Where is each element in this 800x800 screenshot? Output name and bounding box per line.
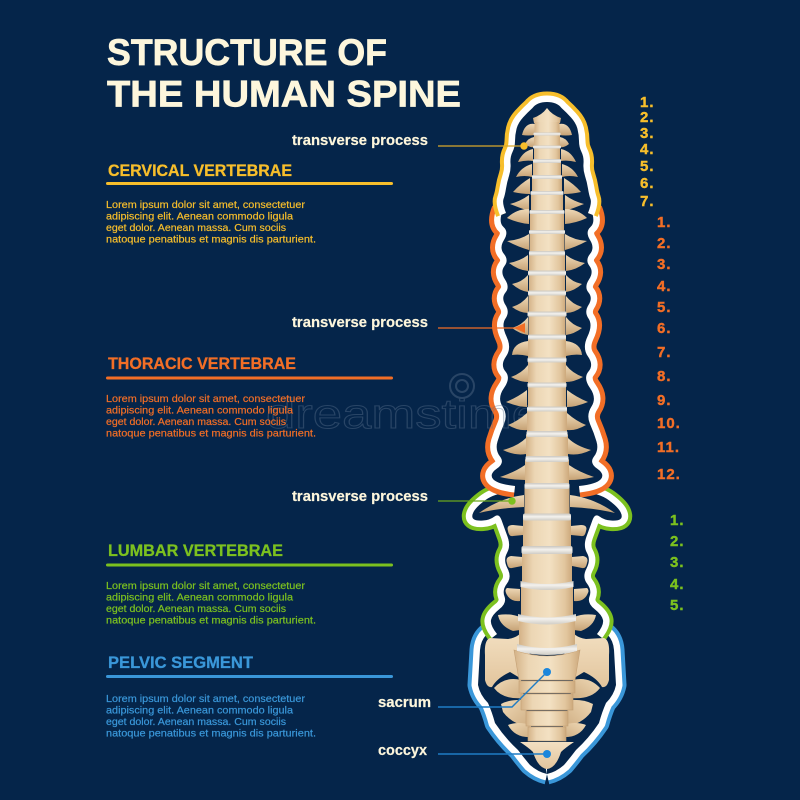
text block	[106, 199, 316, 246]
text block: natoque penatibus et magnis dis parturient.	[106, 428, 316, 440]
numbers: thoracic: 3.	[657, 256, 672, 273]
sacrum central plates	[514, 650, 580, 741]
text block: Lorem ipsum dolor sit amet, consectetuer	[106, 580, 306, 592]
numbers: cervical: 3.	[640, 125, 655, 142]
title: STRUCTURE OF	[107, 31, 387, 73]
numbers: thoracic	[657, 214, 681, 483]
callout: thoracic transverse process	[292, 314, 525, 333]
text block: Lorem ipsum dolor sit amet, consectetuer	[106, 393, 306, 405]
numbers: cervical: 6.	[640, 175, 655, 192]
numbers: thoracic: 9.	[657, 392, 672, 409]
text block: adipiscing elit. Aenean commodo ligula	[106, 404, 293, 416]
heading rule	[106, 675, 393, 678]
numbers: thoracic: 2.	[657, 235, 672, 252]
watermark: dreamstime	[266, 390, 541, 437]
numbers: lumbar: 3.	[670, 554, 685, 571]
text block	[106, 580, 316, 626]
numbers: thoracic: 1.	[657, 214, 672, 231]
text block: eget dolor. Aenean massa. Cum sociis	[106, 222, 286, 234]
numbers: cervical: 2.	[640, 109, 655, 126]
text block: eget dolor. Aenean massa. Cum sociis	[106, 716, 286, 728]
vertebral bodies	[519, 108, 575, 650]
watermark	[266, 374, 541, 437]
text block: adipiscing elit. Aenean commodo ligula	[106, 592, 293, 604]
numbers: thoracic: 5.	[657, 299, 672, 316]
callout: thoracic transverse process: transverse process	[292, 314, 428, 331]
callout: cervical transverse process	[292, 132, 528, 150]
transverse processes	[479, 124, 615, 631]
heading: cervical vertebrae: CERVICAL VERTEBRAE	[108, 161, 292, 180]
numbers: lumbar: 1.	[670, 512, 685, 529]
numbers: lumbar: 4.	[670, 576, 685, 593]
text block: eget dolor. Aenean massa. Cum sociis	[106, 416, 286, 428]
text block: natoque penatibus et magnis dis parturient.	[106, 614, 316, 626]
callout: lumbar transverse process	[292, 488, 516, 505]
numbers: cervical: 1.	[640, 94, 655, 111]
numbers: cervical: 7.	[640, 193, 655, 210]
numbers: cervical: 5.	[640, 158, 655, 175]
text block	[106, 693, 316, 740]
numbers: cervical	[640, 94, 655, 210]
outline: cervical vertebrae	[503, 102, 591, 213]
section: thoracic vertebrae	[106, 354, 393, 440]
callout: lumbar transverse process: transverse process	[292, 488, 428, 505]
numbers: thoracic: 8.	[657, 368, 672, 385]
numbers: lumbar	[670, 512, 685, 614]
outline: pelvic segment	[478, 630, 616, 774]
text block: natoque penatibus et magnis dis parturient.	[106, 728, 316, 740]
sacrum wings and fins	[485, 630, 609, 737]
spine illustration	[479, 108, 615, 769]
text block: Lorem ipsum dolor sit amet, consectetuer	[106, 199, 306, 211]
text block	[106, 393, 316, 440]
heading rule	[106, 182, 393, 185]
numbers: thoracic: 4.	[657, 278, 672, 295]
title: THE HUMAN SPINE	[107, 72, 461, 114]
text block: natoque penatibus et magnis dis parturient.	[106, 234, 316, 246]
numbers: thoracic: 12.	[657, 466, 681, 483]
text block: adipiscing elit. Aenean commodo ligula	[106, 704, 293, 716]
numbers: thoracic: 11.	[657, 439, 680, 456]
callout: sacrum: sacrum	[378, 694, 431, 711]
numbers: lumbar: 2.	[670, 533, 685, 550]
numbers: thoracic: 10.	[657, 415, 681, 432]
section: lumbar vertebrae	[106, 541, 393, 626]
numbers: thoracic: 6.	[657, 320, 672, 337]
title	[107, 31, 461, 114]
text block: Lorem ipsum dolor sit amet, consectetuer	[106, 693, 306, 705]
numbers: cervical: 4.	[640, 141, 655, 158]
coccyx	[520, 742, 574, 769]
outline: thoracic vertebrae	[492, 210, 602, 486]
section: pelvic segment	[106, 653, 393, 740]
heading rule	[106, 564, 393, 566]
heading: lumbar vertebrae: LUMBAR VERTEBRAE	[108, 541, 283, 560]
callout: sacrum	[378, 668, 551, 711]
intervertebral discs	[517, 132, 577, 655]
heading rule	[106, 376, 393, 380]
heading: pelvic segment: PELVIC SEGMENT	[108, 653, 254, 672]
numbers: thoracic: 7.	[657, 344, 672, 361]
numbers: lumbar: 5.	[670, 597, 685, 614]
callout: coccyx	[378, 742, 551, 759]
heading: thoracic vertebrae: THORACIC VERTEBRAE	[108, 354, 296, 373]
text block: adipiscing elit. Aenean commodo ligula	[106, 210, 293, 222]
text block: eget dolor. Aenean massa. Cum sociis	[106, 603, 286, 615]
outline: lumbar vertebrae	[472, 492, 622, 634]
section: cervical vertebrae	[106, 161, 393, 246]
callout: cervical transverse process: transverse process	[292, 132, 428, 149]
callout: coccyx: coccyx	[378, 742, 428, 759]
